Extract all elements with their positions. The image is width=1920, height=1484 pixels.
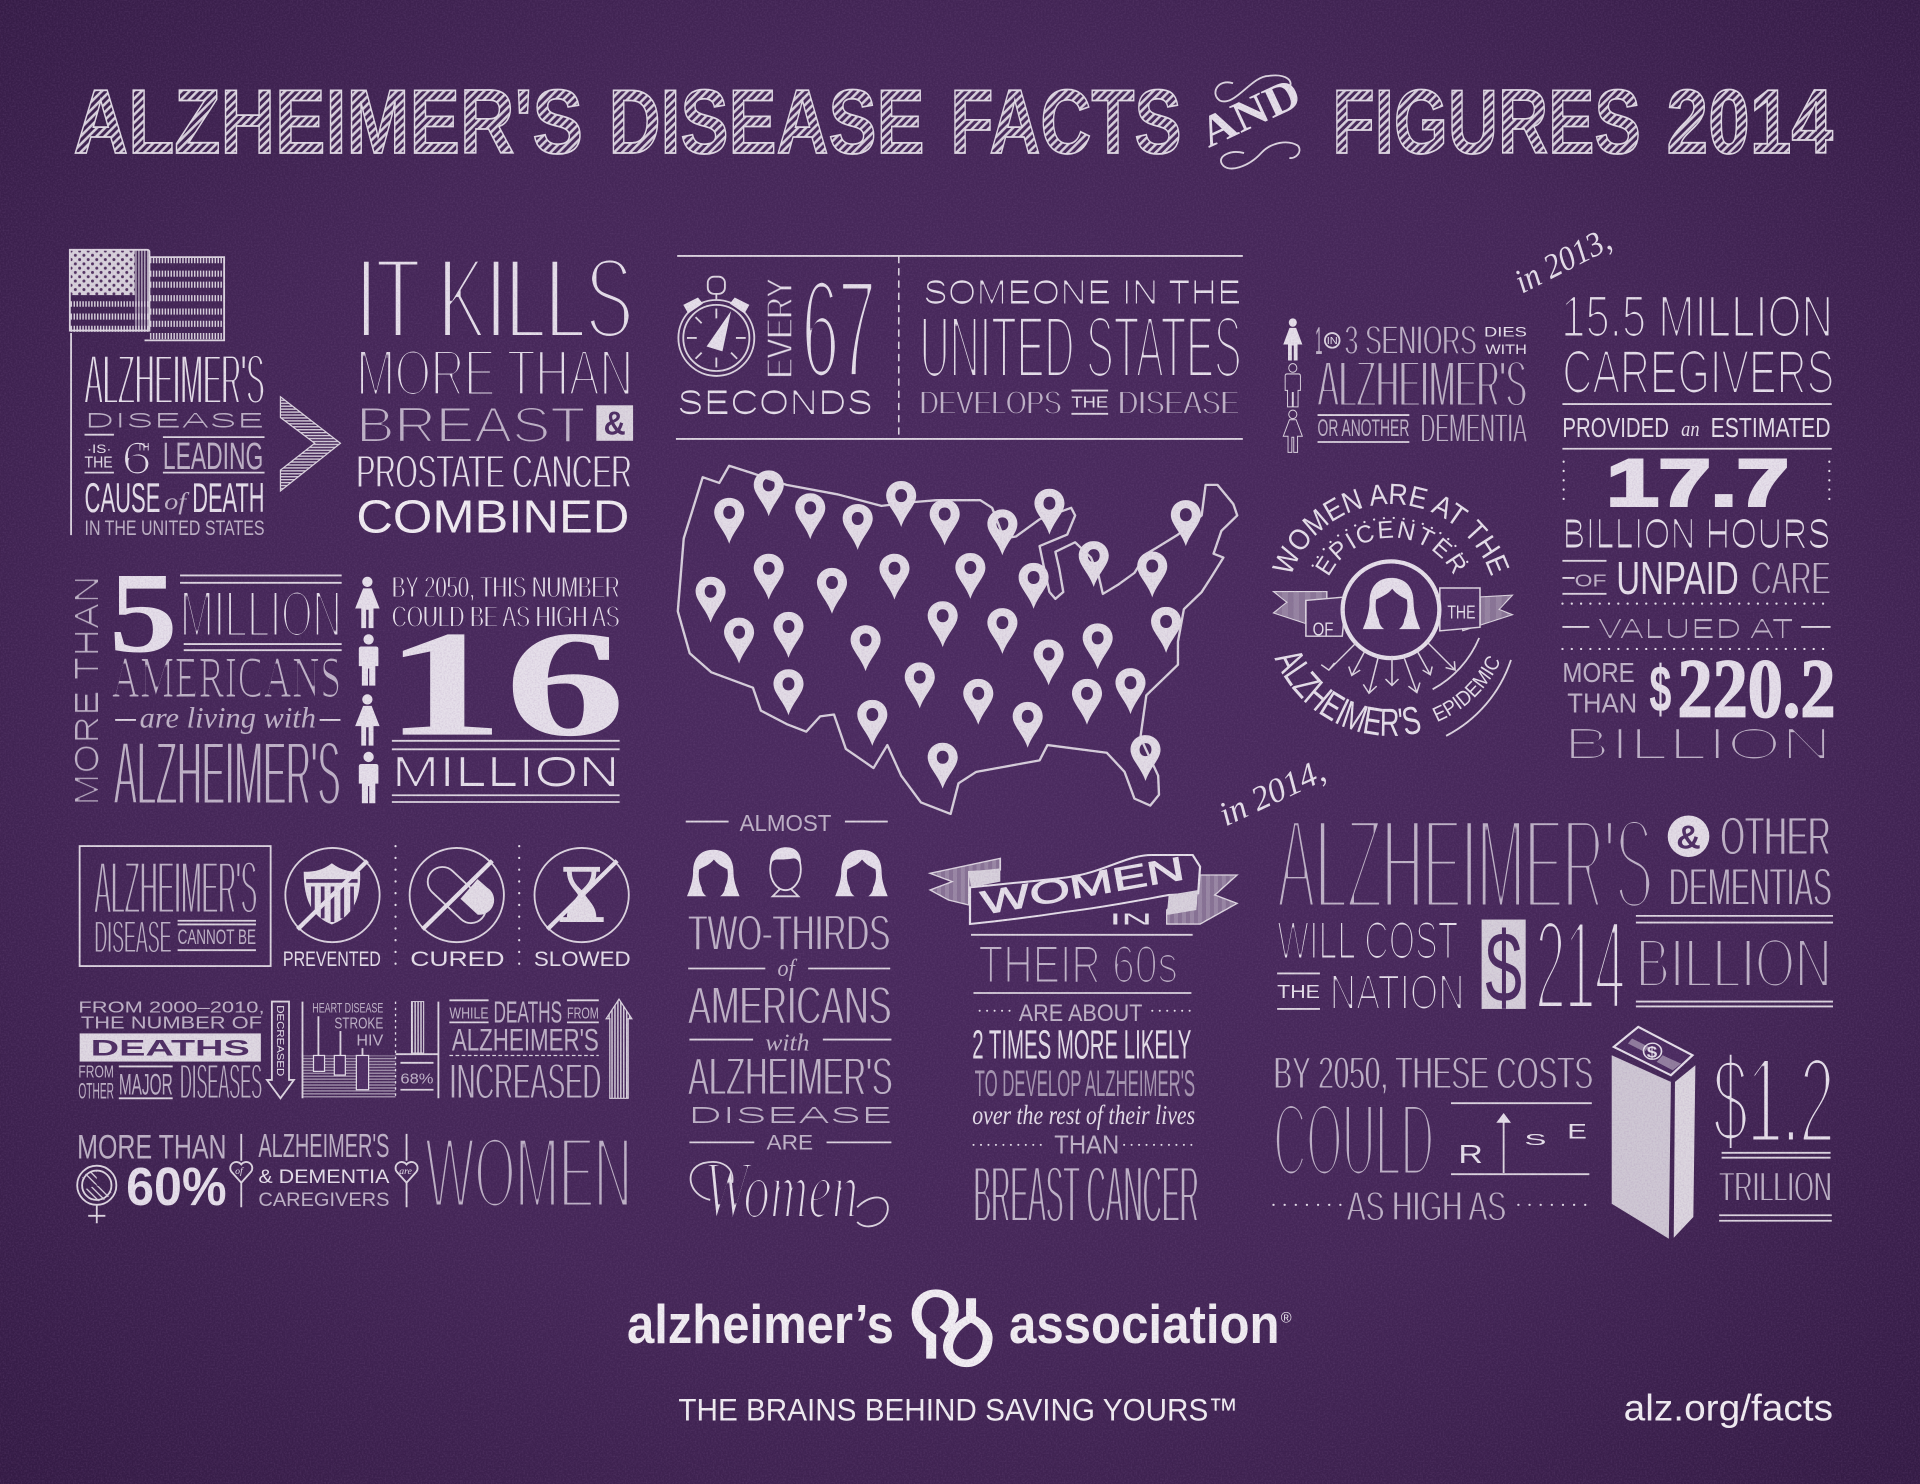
arcs [1433, 638, 1511, 736]
text: of: OF [1575, 570, 1606, 590]
deaths box: DEATHS [91, 1035, 250, 1060]
text: two-thirds: TWO-THIRDS [688, 905, 890, 961]
map outline [678, 466, 1237, 814]
icons: people column [355, 577, 380, 803]
panel: cost to the nation in 2014: 214 [1535, 894, 1625, 1036]
divider with heart [230, 1134, 418, 1207]
rules [676, 256, 1243, 439]
title: FIGURES [1332, 72, 1641, 173]
text: someone in the: SOMEONE IN THE [923, 275, 1242, 312]
rise graphic: R [1458, 1141, 1483, 1169]
panel: women in their 60s [930, 850, 1237, 1240]
divider with heart: are [399, 1166, 413, 1177]
text: number 16: 16 [383, 600, 626, 768]
text: dementia: DEMENTIA [1420, 405, 1527, 451]
text: than: THAN [1567, 688, 1637, 719]
panel: deaths from other diseases decreased: DISEASES [180, 1055, 262, 1109]
text: estimated: ESTIMATED [1711, 412, 1831, 443]
icon: prevented shield [285, 848, 380, 942]
title: FACTS [950, 72, 1182, 173]
panel: cost to the nation in 2014 [1213, 752, 1833, 1036]
text: number 5: 5 [109, 548, 178, 676]
dollar box [1482, 912, 1526, 1024]
text: 60 percent: 60% [126, 1157, 227, 1217]
text: could be as high as: COULD BE AS HIGH AS [392, 600, 620, 634]
text: ALZHEIMER'S [85, 341, 265, 420]
text: dollar amount: 220.2 [1678, 643, 1835, 735]
text: in 2013: in 2013, [1508, 220, 1617, 301]
icons: three heads [687, 847, 888, 896]
icon: stopwatch [678, 277, 754, 376]
text: over the rest of their lives: over the rest of their lives [972, 1100, 1195, 1130]
rules [1719, 1153, 1832, 1221]
panel: costs by 2050: COULD [1273, 1082, 1434, 1198]
box rule [71, 333, 265, 535]
text: nation: NATION [1330, 966, 1464, 1020]
text: cured: CURED [410, 948, 505, 971]
icon: woman head circle [1343, 561, 1439, 658]
panel: almost two-thirds are women [686, 810, 893, 1235]
text: provided: PROVIDED [1562, 412, 1669, 443]
dotted dividers [396, 846, 519, 966]
title: ALZHEIMER'S [74, 72, 583, 173]
icons: three people [1283, 318, 1302, 452]
panel: one in three seniors [1283, 317, 1527, 452]
panel: cannot be prevented, cured, slowed: DISEASE [94, 912, 171, 963]
text: or another: OR ANOTHER [1318, 415, 1409, 442]
text: and dementia: & DEMENTIA [258, 1166, 390, 1188]
text: more than: MORE THAN [77, 1128, 227, 1166]
panel: women in their 60s: TO DEVELOP ALZHEIMER'S [975, 1063, 1195, 1104]
title: 2014 [1666, 72, 1833, 173]
text: cause: CAUSE [85, 474, 160, 521]
text: almost: ALMOST [740, 810, 831, 836]
text: association: association [1009, 1293, 1280, 1355]
text: caregivers: CAREGIVERS [258, 1189, 389, 1211]
dotted arc [1313, 518, 1469, 566]
rules [1636, 916, 1833, 1006]
icon: money stack [1612, 1027, 1695, 1239]
text: are living with: are living with [140, 702, 316, 734]
icon: decreased arrow [267, 1002, 294, 1098]
chart: disease death declines: HIV [356, 1033, 384, 1050]
icon: American flag [70, 250, 224, 340]
icon: female pie chart [77, 1166, 116, 1223]
text: slowed: SLOWED [534, 948, 631, 971]
rules [1562, 404, 1832, 449]
text: URL: alz.org/facts [1624, 1387, 1833, 1428]
text: are about: ARE ABOUT [1019, 1000, 1142, 1027]
panel: sixth leading cause of death [70, 250, 265, 540]
text: UNITED STATES [920, 299, 1242, 396]
text: the: THE [1447, 601, 1475, 622]
dots [973, 1011, 1196, 1145]
text: 15.5 million: 15.5 MILLION [1561, 285, 1833, 350]
rise graphic [1451, 1103, 1592, 1174]
text: prevented: PREVENTED [283, 948, 381, 971]
text: 17.7: 17.7 [1606, 447, 1789, 521]
text: disease: DISEASE [1118, 385, 1239, 422]
text: Alzheimer's: ALZHEIMER'S [1274, 653, 1420, 736]
rise graphic: E [1567, 1121, 1587, 1144]
text: in the United States: IN THE UNITED STATES [85, 517, 265, 540]
text: every: EVERY [759, 278, 800, 378]
text: Alzheimer's: ALZHEIMER'S [688, 1048, 893, 1107]
footer: association logo [627, 1293, 1833, 1428]
panel: deaths from other diseases decreased: OTHER [78, 1078, 114, 1103]
panel: every 67 seconds [676, 251, 1243, 439]
text: dollar amount: $ [1649, 652, 1671, 726]
box [80, 846, 271, 966]
text: by 2050: BY 2050, THIS NUMBER [392, 571, 620, 605]
text: women: WOMEN [425, 1115, 632, 1229]
text: of: of [164, 488, 190, 515]
text: the number of: THE NUMBER OF [81, 1013, 262, 1033]
text: breast: BREAST [356, 397, 585, 453]
text: more than vertical: MORE THAN [69, 575, 106, 806]
icon: sixth: 6 [121, 432, 152, 484]
text: from 2000-2010: FROM 2000–2010, [78, 1000, 265, 1017]
text: other: OTHER [1720, 807, 1831, 867]
chart: disease death declines: 68% [400, 1072, 433, 1088]
text: more than: MORE THAN [356, 336, 633, 410]
icon: ampersand circle: & [1676, 820, 1701, 857]
text: 1 in 3 seniors: 3 SENIORS [1344, 317, 1477, 363]
ampersand box: & [604, 406, 626, 443]
divider with heart: of [235, 1166, 244, 1177]
text: death: DEATH [192, 474, 265, 521]
text: women are at the: WOMEN ARE AT THE [1272, 484, 1510, 576]
banner [930, 855, 1237, 924]
text: tagline: THE BRAINS BEHIND SAVING YOURS™ [678, 1391, 1238, 1427]
text: of: OF [1313, 618, 1333, 639]
text: the: THE [1277, 981, 1320, 1002]
text: epicenter: EPICENTER [1315, 520, 1466, 576]
text: it kills: IT KILLS [356, 235, 633, 363]
panel: cannot be prevented, cured, slowed [80, 845, 631, 971]
text: in 2014: in 2014, [1213, 752, 1331, 834]
text: BREAST CANCER [973, 1150, 1199, 1240]
text: Americans: AMERICANS [688, 977, 891, 1036]
text: as high as: AS HIGH AS [1347, 1183, 1506, 1230]
title: and ornament: AND [1192, 68, 1308, 157]
icon: sixth: TH [137, 442, 149, 454]
panel: deaths from other diseases decreased [78, 995, 632, 1109]
text: the: THE [1071, 395, 1108, 412]
panel: five million Americans: ALZHEIMER'S [114, 723, 340, 824]
text: with: WITH [1485, 341, 1527, 357]
text: care: CARE [1751, 552, 1831, 604]
rules [392, 741, 620, 802]
text: ALZHEIMER'S [1318, 348, 1527, 422]
text: leading: LEADING [163, 436, 263, 478]
text: in: IN [1109, 911, 1152, 928]
panel: caregivers are women [77, 1115, 632, 1229]
chart: disease death declines: HEART DISEASE [312, 1001, 383, 1016]
deaths box [80, 1033, 261, 1062]
text: major: MAJOR [119, 1069, 173, 1102]
text: cannot be: CANNOT BE [178, 926, 256, 949]
text: than: THAN [1054, 1131, 1119, 1159]
text: epidemic: EPIDEMIC [1432, 656, 1499, 722]
chart: disease death declines [302, 1001, 438, 1098]
text: an: an [1681, 416, 1700, 441]
icon: brain logo [917, 1293, 988, 1363]
text: increased: INCREASED [449, 1053, 601, 1109]
rise graphic: S [1524, 1132, 1546, 1149]
text: disease: DISEASE [85, 409, 265, 432]
text: while: WHILE [449, 1006, 489, 1023]
text: registered mark: ® [1281, 1310, 1292, 1326]
chart: disease death declines: STROKE [334, 1016, 383, 1033]
panel: it kills more than [356, 235, 633, 543]
text: by 2050 these costs: BY 2050, THESE COSTS [1273, 1048, 1593, 1099]
text: Alzheimer's: ALZHEIMER'S [452, 1022, 599, 1058]
text: are: ARE [767, 1132, 813, 1155]
text: more: MORE [1562, 657, 1635, 688]
text: with: with [765, 1030, 809, 1057]
panel: five million Americans [69, 548, 626, 824]
ribbon [1273, 588, 1513, 636]
text: 1 in 3 seniors: IN [1327, 336, 1338, 347]
text: will cost: WILL COST [1277, 912, 1458, 971]
ampersand box [596, 405, 633, 443]
icon: ampersand circle [1668, 815, 1709, 857]
text: billion hours: BILLION HOURS [1562, 510, 1831, 556]
map: United States with location pins [678, 466, 1237, 814]
icon: increased arrow [606, 999, 632, 1098]
text: unpaid: UNPAID [1616, 552, 1739, 604]
text: trillion: TRILLION [1719, 1163, 1832, 1210]
location pins [696, 470, 1201, 789]
text: their 60s: THEIR 60s [978, 936, 1178, 995]
text: combined: COMBINED [356, 491, 629, 543]
icon: decreased arrow: DECREASED [274, 1005, 285, 1076]
text: prostate cancer: PROSTATE CANCER [356, 445, 632, 497]
text: alzheimer's: alzheimer’s [627, 1293, 894, 1355]
text: the: THE [85, 455, 113, 472]
dots [1273, 1204, 1587, 1206]
text: from other: FROM [78, 1061, 114, 1081]
rules [971, 935, 1193, 993]
text: million: MILLION [180, 578, 342, 652]
text: from: FROM [567, 1006, 599, 1023]
text: Americans: AMERICANS [111, 647, 342, 710]
icon: slowed hourglass [535, 848, 629, 942]
text: billion: BILLION [1636, 924, 1832, 1002]
text: dies: DIES [1484, 324, 1527, 340]
rules [115, 575, 342, 720]
panel: women at the epicenter badge [1272, 484, 1514, 737]
text: deaths: DEATHS [493, 995, 562, 1029]
text: of: of [778, 955, 798, 982]
text: develops: DEVELOPS [920, 385, 1062, 422]
panel: costs by 2050 [1273, 1027, 1834, 1239]
text: million: MILLION [392, 748, 620, 795]
text: 2 times more likely: 2 TIMES MORE LIKELY [972, 1022, 1191, 1068]
icon: money stack: $ [1647, 1043, 1658, 1061]
text: seconds: SECONDS [677, 384, 873, 422]
text: valued at: VALUED AT [1598, 613, 1794, 644]
text: 1 in 3 seniors: 1 [1315, 320, 1322, 363]
text: women script: Women [704, 1146, 858, 1235]
panel: every 67 seconds: 67 [802, 251, 876, 407]
title [74, 72, 1833, 173]
panel: caregivers in 2013 [1508, 220, 1835, 769]
dollar box: $ [1485, 912, 1522, 1024]
text: 1 in 3 seniors [1315, 317, 1477, 363]
icon: greater-than chevron [280, 397, 340, 491]
icons: radiating arrows [1321, 643, 1455, 693]
icon: cured pill [410, 848, 504, 942]
text: billion: BILLION [1564, 720, 1832, 769]
text: Alzheimer's: ALZHEIMER'S [258, 1128, 389, 1165]
dotted decorations [1562, 462, 1832, 649]
text: is the: ·IS· [87, 442, 111, 456]
text: disease: DISEASE [688, 1102, 893, 1128]
text: women: WOMEN [978, 850, 1187, 923]
title: DISEASE [609, 72, 924, 173]
panel: cannot be prevented, cured, slowed: ALZHEIMER'S [94, 845, 257, 929]
